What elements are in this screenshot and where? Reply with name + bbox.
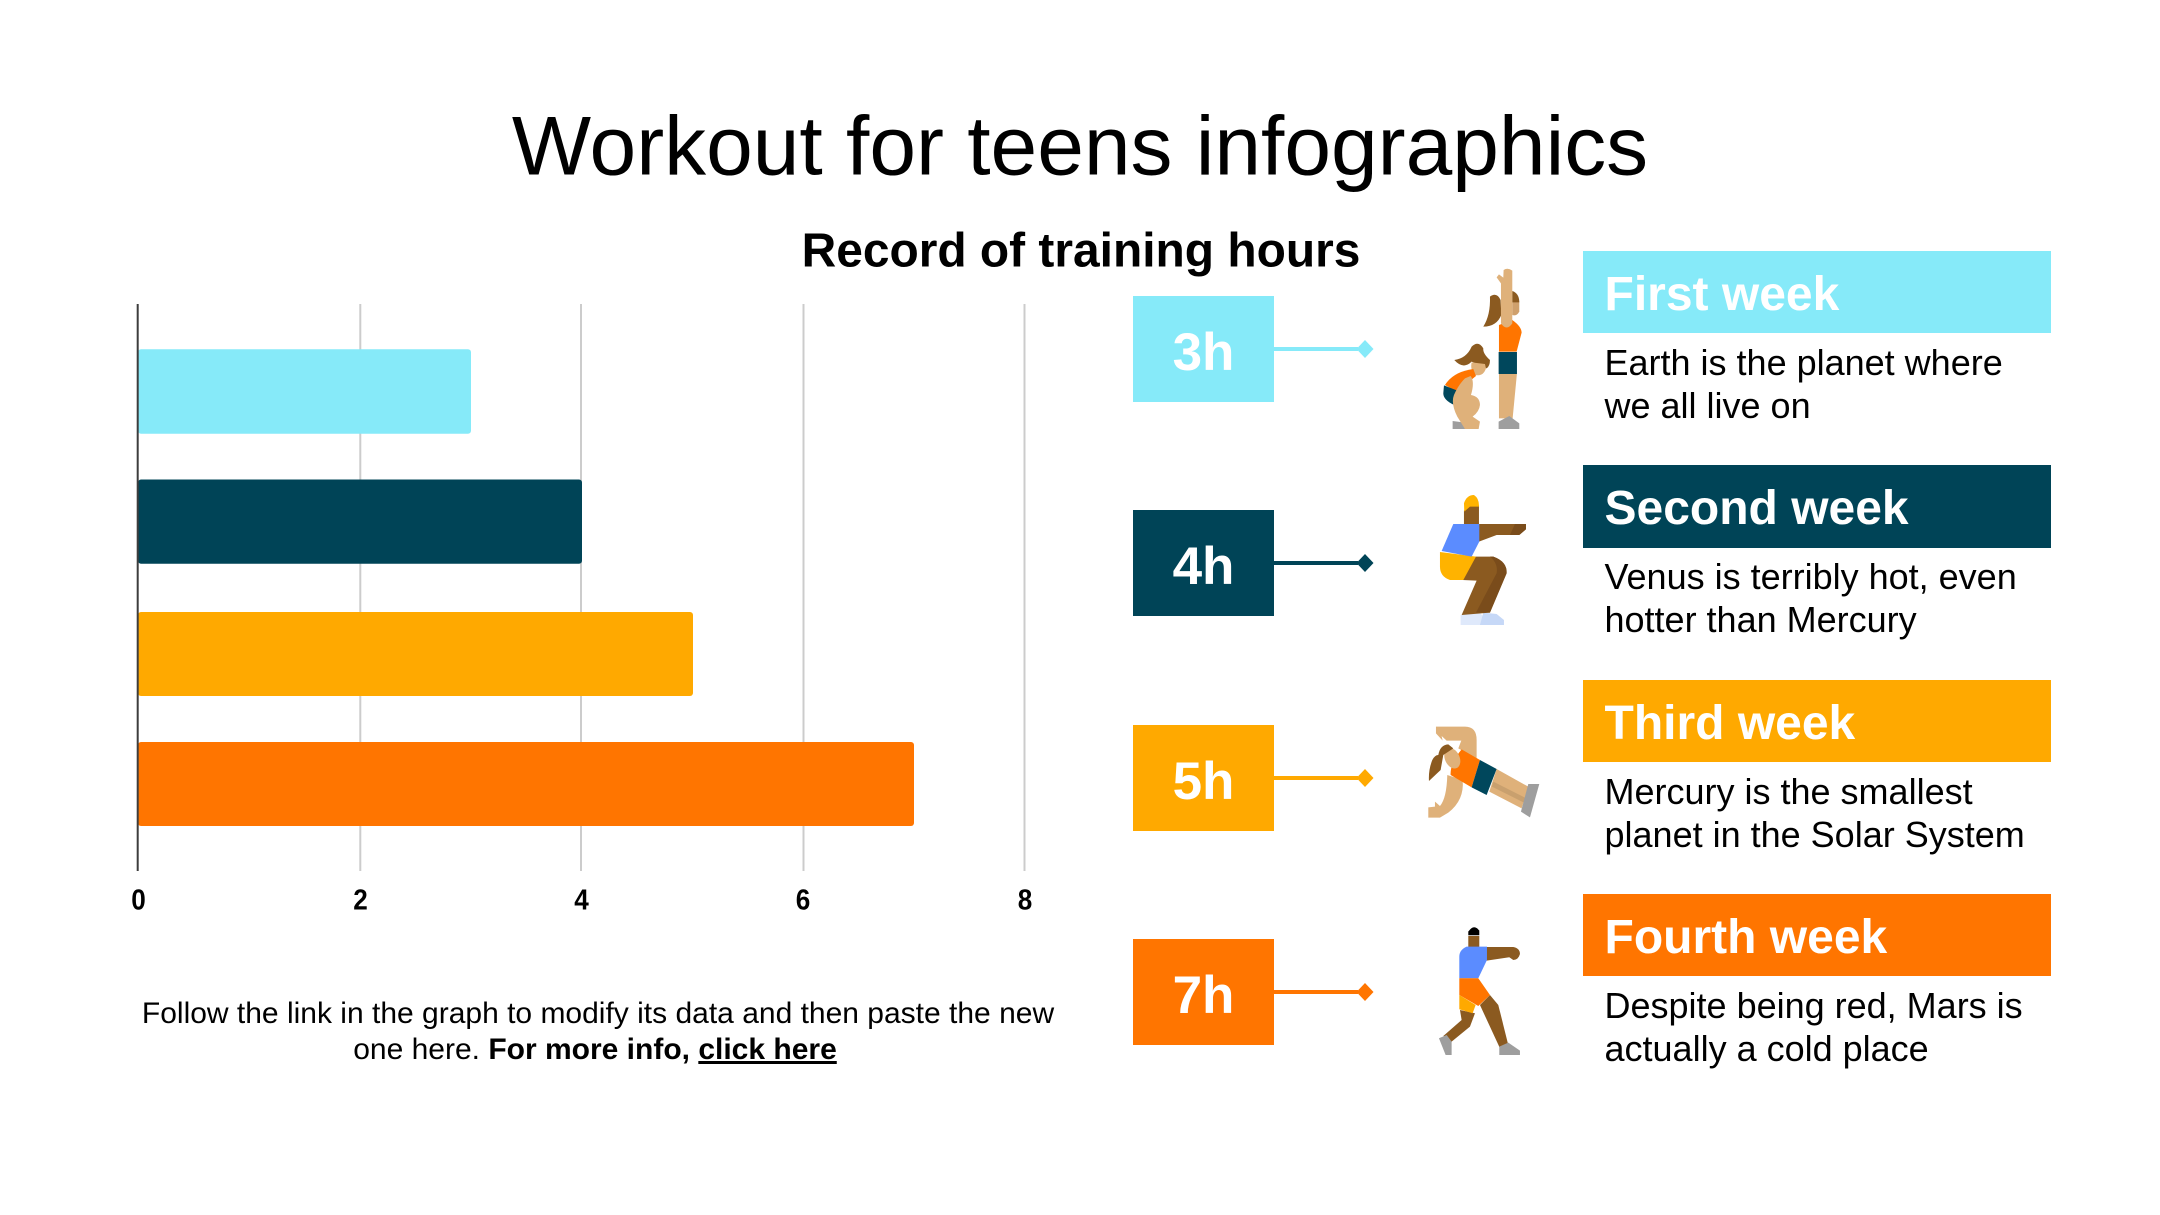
footnote text: one here. For more info, click here <box>353 1033 837 1066</box>
axis labels: 4 <box>574 883 589 916</box>
week description: planet in the Solar System <box>1604 814 2025 855</box>
week header: Second week <box>1583 465 2051 548</box>
week header: Fourth week <box>1583 894 2051 976</box>
week description: Earth is the planet where <box>1604 342 2003 383</box>
week description: Mercury is the smallest <box>1604 771 1973 812</box>
bar: second week <box>138 480 582 564</box>
axis labels: 8 <box>1018 883 1032 916</box>
week description: actually a cold place <box>1604 1028 1929 1069</box>
bar: fourth week <box>138 742 914 826</box>
connector arrow <box>1274 554 1374 572</box>
week title: Fourth week <box>1604 911 1888 964</box>
week description: Venus is terribly hot, even <box>1604 556 2017 597</box>
axis labels <box>131 883 1032 916</box>
bar: third week <box>138 612 693 696</box>
chart heading: Record of training hours <box>802 224 1360 278</box>
week description: hotter than Mercury <box>1604 599 1917 640</box>
icon: two women doing squat stretch <box>1443 269 1522 429</box>
hours label: 5h: 5h <box>1173 752 1234 811</box>
axis labels: 0 <box>131 883 146 916</box>
hours label: 7h: 7h <box>1173 966 1234 1025</box>
connector arrow <box>1274 983 1374 1001</box>
axis labels: 6 <box>796 883 810 916</box>
hours box: 3h <box>1133 296 1274 402</box>
connector arrow <box>1274 340 1374 358</box>
row: first week <box>1133 251 2051 429</box>
axis labels: 2 <box>353 883 368 916</box>
hours box: 5h <box>1133 725 1274 831</box>
footnote text: Follow the link in the graph to modify its data and then paste the new <box>142 997 1054 1030</box>
week header: First week <box>1583 251 2051 333</box>
week title: Second week <box>1604 482 1909 535</box>
hours box: 7h <box>1133 939 1274 1045</box>
icon: man doing air squat <box>1440 495 1526 625</box>
week header: Third week <box>1583 680 2051 762</box>
hours label: 3h: 3h <box>1173 323 1234 382</box>
icon: man throwing a punch <box>1439 927 1520 1055</box>
week title: Third week <box>1604 697 1856 750</box>
row: second week <box>1133 465 2051 640</box>
week description: we all live on <box>1604 385 1811 426</box>
bar chart <box>131 304 1032 916</box>
row: third week <box>1133 680 2051 855</box>
icon: woman doing plank <box>1428 727 1539 818</box>
title: Workout for teens infographics <box>512 98 1648 192</box>
hours box: 4h <box>1133 510 1274 616</box>
week description: Despite being red, Mars is <box>1604 985 2023 1026</box>
connector arrow <box>1274 769 1374 787</box>
week title: First week <box>1604 268 1840 321</box>
bar: first week <box>138 349 471 434</box>
row: fourth week <box>1133 894 2051 1069</box>
hours label: 4h: 4h <box>1173 537 1234 596</box>
